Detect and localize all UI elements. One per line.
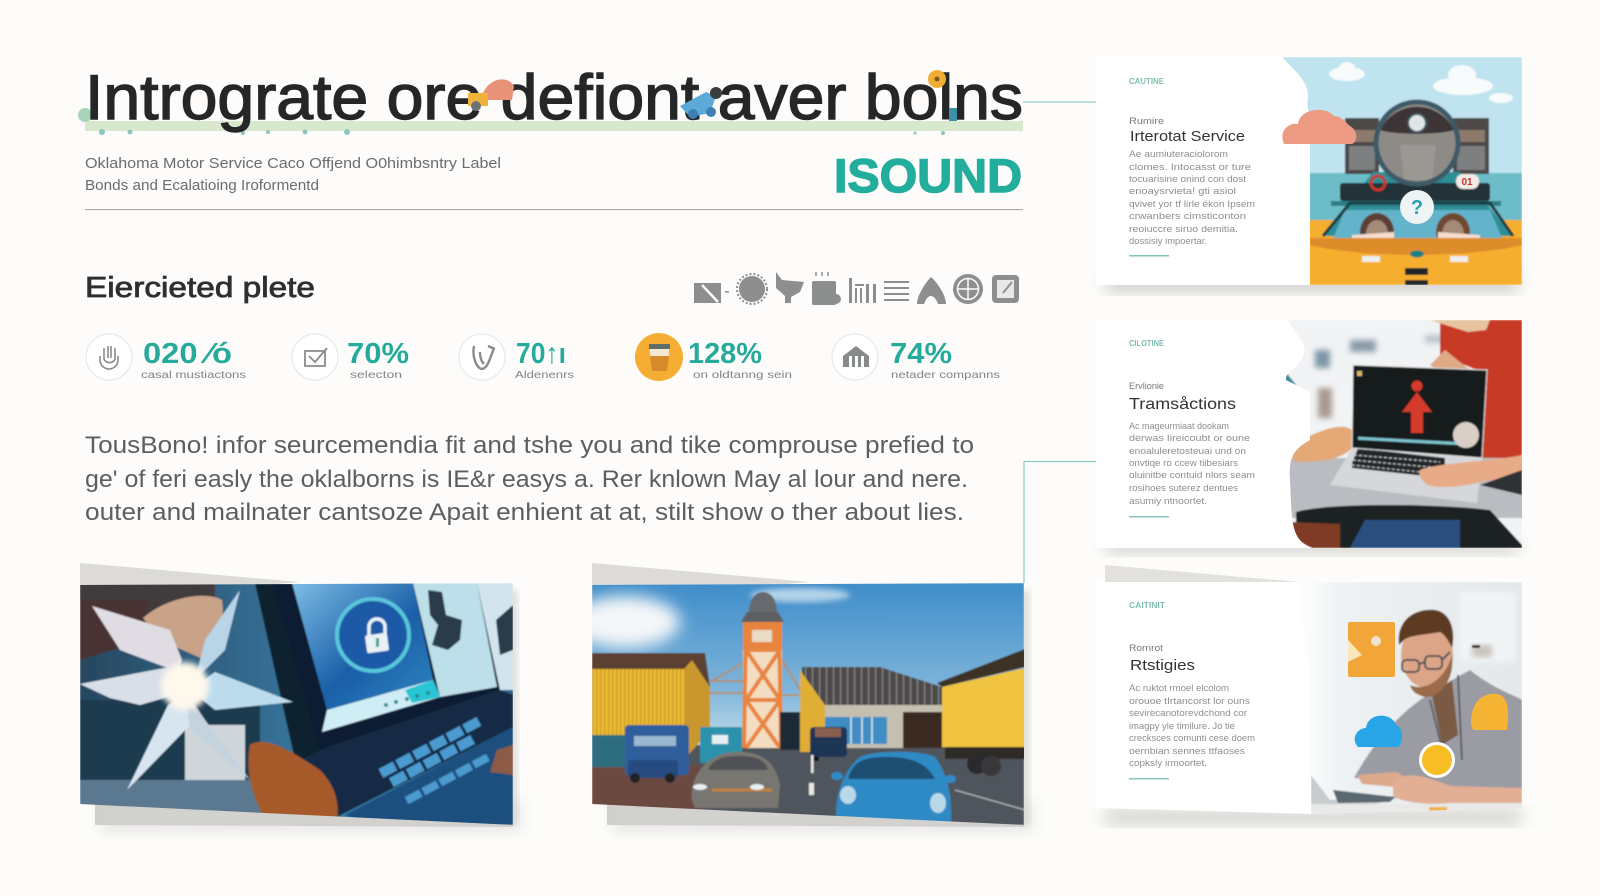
stat 3	[459, 334, 574, 381]
card text: qvivet yor tf lirle ékon Ipsem	[1129, 199, 1255, 210]
paragraph: outer and mailnater cantsoze Apait enhient at at, stilt show o ther about lies.	[85, 499, 964, 526]
card shadow	[1106, 272, 1518, 292]
card body	[1096, 320, 1522, 548]
photo: laptop on table	[1282, 320, 1525, 548]
card text: enoaluleretosteuai und on	[1129, 446, 1246, 457]
photo backing shadow	[592, 563, 1032, 832]
icon: blue car	[680, 87, 722, 119]
photo: depot and cars	[570, 563, 1032, 832]
card text	[1129, 77, 1255, 256]
stat 2	[292, 334, 409, 381]
badge number: 01	[1461, 177, 1473, 188]
icon: globe	[953, 274, 983, 304]
card text: Ae aumiuteraciolorom	[1129, 149, 1228, 160]
card text: sevirecanotorevdchond cor	[1129, 708, 1247, 719]
card: Irterotat Service	[1096, 57, 1522, 292]
icon: orange marker	[928, 70, 957, 121]
icon: question badge: ?	[1411, 197, 1423, 219]
card text: copksly irmoortet.	[1129, 758, 1207, 769]
stat 4: 128%	[688, 338, 762, 370]
card text: Ac ruktot rmoel elcolom	[1129, 683, 1229, 694]
stats row	[86, 333, 1000, 381]
connector: title to card	[1023, 101, 1096, 103]
card text: crecksces comunti cese doem	[1129, 733, 1255, 744]
connector: image to card	[1024, 462, 1096, 583]
brand wordmark: ISOUND	[834, 149, 1022, 202]
icon: letter shape	[917, 277, 946, 304]
card text: dossisiy impoertar.	[1129, 236, 1207, 247]
card text: orouoe tIrtancorst lor ouns	[1129, 696, 1250, 707]
title	[78, 63, 1023, 135]
stat 1: 020 ⁄ó	[143, 338, 232, 370]
card: Transactions	[1096, 320, 1525, 554]
icon: note	[694, 283, 729, 303]
stat 5: netader companns	[891, 369, 1000, 381]
title small marks	[78, 108, 945, 135]
paragraph: ge' of feri easly the oklalborns is IE&r easys a. Rer knlown May al lour and nere.	[85, 466, 968, 493]
card text: asumiy ntnoortet.	[1129, 496, 1207, 507]
card text: Rumire	[1129, 116, 1164, 127]
card: Rtstigies	[1096, 565, 1522, 825]
stat 1	[86, 334, 246, 381]
photo: cybersecurity laptop	[80, 563, 520, 832]
icon: document	[812, 272, 841, 305]
photo backing shadow	[80, 563, 520, 832]
section heading: Eiercieted plete	[85, 272, 315, 304]
stat 4	[635, 333, 792, 381]
card text: imagpy yle timilure. Jo tie	[1129, 721, 1235, 732]
stat 5	[832, 334, 1000, 381]
card text: Tramsåctions	[1129, 395, 1236, 413]
card text: crwanbers cimsticonton	[1129, 211, 1246, 222]
stat 3: Aldenenrs	[515, 369, 574, 381]
subtitle: Oklahoma Motor Service Caco Offjend O0himbsntry Label	[85, 155, 501, 172]
card text	[1129, 601, 1255, 780]
card text: rosihoes suterez dentues	[1129, 483, 1238, 494]
card text	[1129, 339, 1255, 518]
stat 3: 70↑ı	[516, 338, 566, 370]
icon: gear	[737, 274, 767, 304]
stat 2: selecton	[350, 369, 402, 381]
icon: tree	[776, 272, 804, 303]
card shadow	[1106, 538, 1518, 554]
icon: edit box	[992, 275, 1019, 303]
card text: oluinitbe contuid nlors seam	[1129, 470, 1255, 481]
card text: Ac mageurmiaat dookam	[1129, 421, 1229, 432]
card text: enoaysrvieta! gti asiol	[1129, 186, 1236, 197]
icon: orange car	[468, 79, 514, 111]
card text: CILOTINE	[1129, 339, 1165, 348]
paragraph: TousBono! infor seurcemendia fit and tshe you and tike comprouse prefied to	[85, 432, 974, 459]
card shadow	[1105, 565, 1522, 825]
stat 2: 70%	[347, 338, 409, 370]
icon: yellow badge	[1419, 742, 1455, 778]
icon: orange square	[1348, 622, 1395, 677]
card text: Ervlionie	[1129, 381, 1164, 392]
icon: bars	[849, 278, 876, 303]
illustration: car dashboard	[1282, 57, 1522, 285]
icon: blue cloud	[1355, 716, 1402, 747]
photo: man at laptop	[1296, 582, 1522, 814]
stat 1: casal mustiactons	[141, 369, 246, 381]
card body	[1096, 57, 1522, 285]
card text: oernbian sennes ttfaoses	[1129, 746, 1245, 757]
card text: tocuarisine onind con dost	[1129, 174, 1246, 185]
card text: clomes. Intocasst or ture	[1129, 162, 1251, 173]
title text: Intrograte ore defiont aver bolns	[85, 63, 1023, 133]
title underline bar	[85, 121, 1023, 131]
icon row	[694, 272, 1019, 305]
subtitle	[85, 155, 501, 194]
card text: derwas Iireicoubt or oune	[1129, 433, 1250, 444]
subtitle: Bonds and Ecalatioing Iroformentd	[85, 177, 319, 194]
card text: CAITINIT	[1129, 601, 1165, 610]
icon: question badge	[1400, 190, 1434, 224]
stat 4: on oldtanng sein	[693, 369, 792, 381]
stat 5: 74%	[890, 338, 952, 370]
card text: CAUTINE	[1129, 77, 1165, 86]
icon: lines	[884, 281, 909, 301]
icon: yellow blob	[1471, 694, 1508, 730]
card body	[1096, 582, 1522, 814]
card text: Rornrot	[1129, 643, 1163, 654]
icon: salmon cloud	[1282, 110, 1356, 144]
card text: Rtstigies	[1130, 657, 1195, 674]
paragraph	[85, 432, 974, 526]
card text: Irterotat Service	[1130, 128, 1245, 145]
card text: onvtiqe ro ccew tiibesiars	[1129, 458, 1238, 469]
card text: reoiuccre siruo demitia.	[1129, 224, 1238, 235]
